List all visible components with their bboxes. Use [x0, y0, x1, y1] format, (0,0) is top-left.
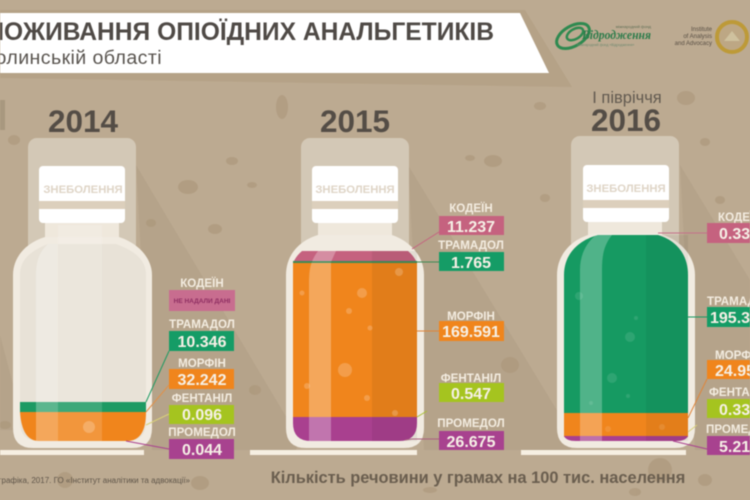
data labels 2015: ПРОМЕДОЛ: [437, 417, 505, 430]
title banner: [0, 10, 572, 87]
bottle 2016: [557, 136, 695, 448]
data labels 2015: [437, 202, 505, 451]
bottle 2015: [286, 138, 424, 448]
liquid: tramadol: [20, 402, 146, 413]
data labels 2015: КОДЕЇН: [449, 202, 493, 215]
data labels 2016: 0.33: [719, 402, 750, 419]
data labels 2014: НЕ НАДАЛИ ДАНІ: [174, 298, 231, 305]
data labels 2014: 32.242: [178, 372, 227, 389]
logo: Vidrodzhennia foundation: [552, 18, 652, 54]
data labels 2015: 26.675: [447, 434, 496, 451]
data labels 2014: ТРАМАДОЛ: [169, 318, 235, 331]
data labels 2015: 169.591: [442, 324, 500, 341]
bottle 2014: [13, 138, 152, 448]
data labels 2014: 0.044: [182, 442, 222, 459]
data labels 2016: [706, 211, 750, 456]
cap label: ЗНЕБОЛЕННЯ: [315, 184, 395, 196]
leader lines: [126, 232, 707, 449]
year 2016: 2016: [591, 102, 661, 138]
liquid: promedol: [564, 436, 688, 441]
logo: Institute of Analysis and Advocacy: of Analysis: [683, 34, 712, 40]
liquid: promedol: [293, 417, 417, 441]
cap label: ЗНЕБОЛЕННЯ: [586, 183, 666, 195]
shelves: [0, 450, 686, 455]
half-year note: І півріччя: [592, 89, 662, 107]
data labels 2014: [168, 277, 236, 459]
data labels 2015: 0.547: [451, 386, 491, 403]
cap label: ЗНЕБОЛЕННЯ: [43, 184, 123, 196]
data labels 2015: ФЕНТАНІЛ: [441, 372, 501, 385]
liquid: morphine: [20, 412, 146, 441]
data labels 2014: ФЕНТАНІЛ: [172, 392, 232, 405]
logo: Vidrodzhennia foundation: міжнародний фонд: [616, 24, 652, 29]
year 2015: 2015: [320, 103, 390, 139]
data labels 2015: 1.765: [451, 255, 491, 272]
data labels 2014: КОДЕЇН: [180, 277, 224, 290]
data labels 2014: 10.346: [178, 334, 227, 351]
liquid: morphine: [293, 263, 417, 417]
logo: Vidrodzhennia foundation: Міжнародний фонд «Відродження»: [577, 43, 634, 47]
liquid: tramadol: [564, 235, 688, 413]
data labels 2015: МОРФІН: [447, 310, 495, 323]
data labels 2014: ПРОМЕДОЛ: [168, 426, 236, 439]
liquid: codeine: [293, 251, 417, 263]
liquid: morphine: [564, 413, 688, 437]
data labels 2014: МОРФІН: [178, 357, 226, 370]
data labels 2016: 5.21: [719, 439, 750, 456]
logo: Vidrodzhennia foundation: Відродження: [581, 28, 652, 42]
data labels 2015: ТРАМАДОЛ: [438, 239, 504, 252]
data labels 2016: 0.33: [719, 226, 750, 243]
logo: Institute of Analysis and Advocacy: Institute: [691, 27, 713, 33]
crest: [0, 100, 5, 130]
year 2014: 2014: [48, 103, 119, 139]
liquid: tramadol line: [293, 261, 417, 263]
data labels 2015: 11.237: [447, 219, 495, 236]
units caption: Кількість речовини у грамах на 100 тис. населення: [271, 469, 685, 487]
data labels 2014: 0.096: [182, 407, 222, 424]
data labels 2016: 195.3: [710, 310, 750, 327]
codeine box 2014: [169, 290, 235, 311]
logo: Institute of Analysis and Advocacy: and Advocacy: [675, 41, 712, 47]
logo: Institute of Analysis and Advocacy: [675, 22, 747, 52]
